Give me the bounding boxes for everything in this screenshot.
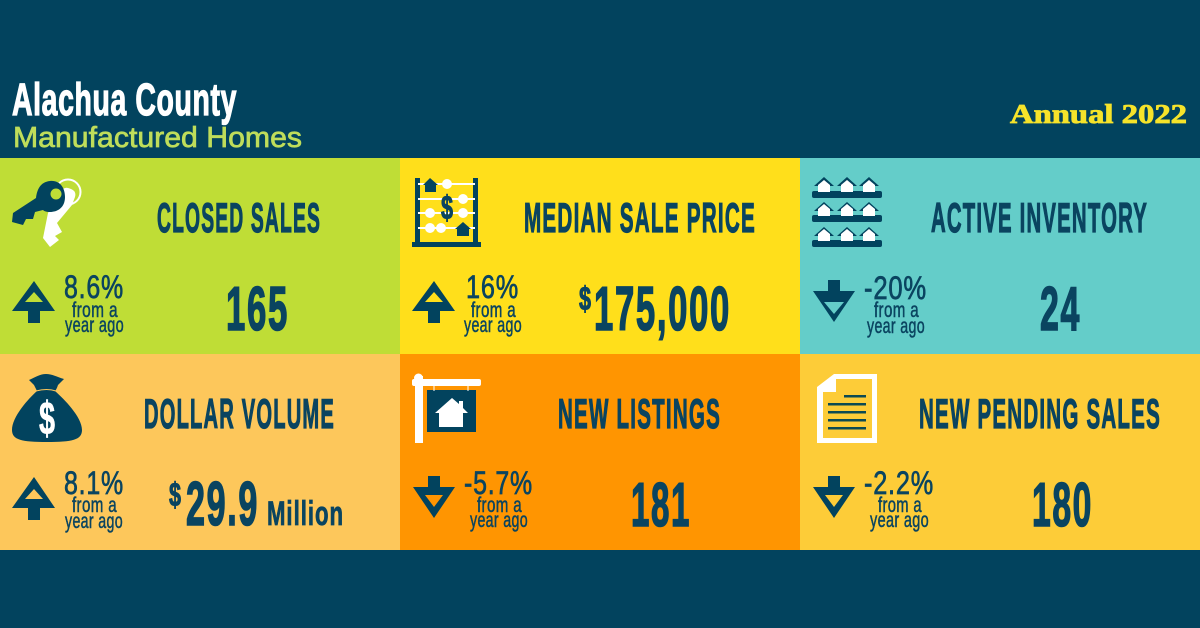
value: 165 [226, 275, 289, 344]
subtitle: Manufactured Homes [13, 122, 302, 154]
icon: down arrow [413, 476, 455, 518]
change text: from a [72, 494, 117, 517]
change text [64, 465, 124, 533]
change text: 16% [466, 269, 519, 305]
icon: document [817, 374, 877, 443]
change text: year ago [470, 509, 528, 532]
icon: abacus: $ [441, 189, 453, 226]
change text [864, 465, 934, 532]
panel: new listings: NEW LISTINGS [558, 390, 721, 437]
value: 24 [1040, 275, 1081, 344]
change text: year ago [867, 315, 925, 338]
change text: year ago [870, 509, 929, 532]
period label: Annual 2022 [1010, 99, 1187, 129]
change text: -5.7% [464, 465, 533, 501]
change text [464, 269, 522, 337]
icon: up arrow [12, 281, 55, 323]
panel: dollar volume [0, 354, 400, 550]
icon: money bag [12, 374, 82, 444]
icon: down arrow [813, 476, 855, 518]
change text: -2.2% [864, 465, 934, 501]
change text: from a [72, 299, 118, 322]
panel: new listings [400, 354, 800, 550]
panel: closed sales [0, 158, 400, 354]
change text [864, 270, 927, 338]
change text: year ago [65, 314, 124, 337]
change text: -20% [864, 270, 927, 306]
panel: dollar volume: DOLLAR VOLUME [144, 390, 335, 437]
change text: from a [874, 299, 919, 322]
change text [464, 465, 533, 532]
icon: up arrow [12, 477, 55, 520]
change text: year ago [65, 510, 123, 533]
icon: down arrow [813, 280, 855, 322]
change text [64, 269, 124, 337]
icon: up arrow [412, 281, 455, 323]
icon: money bag: $ [39, 392, 55, 444]
title: Alachua County [12, 74, 237, 125]
icon: keys [12, 180, 80, 247]
change text: from a [477, 494, 522, 517]
icon: houses on shelves [812, 177, 882, 247]
header [12, 74, 1187, 154]
panel: new pending sales [800, 354, 1200, 550]
value: 29.9 [186, 470, 259, 539]
icon: abacus [412, 178, 481, 247]
value: Million [267, 495, 344, 533]
value: 181 [631, 471, 691, 540]
value: $ [579, 280, 591, 317]
change text: from a [878, 494, 922, 517]
icon: house sign [412, 374, 481, 443]
panel: median sale price: MEDIAN SALE PRICE [524, 194, 756, 241]
value [579, 275, 731, 344]
panel: closed sales: CLOSED SALES [157, 194, 321, 241]
panel: active inventory [800, 158, 1200, 354]
change text: from a [471, 299, 516, 322]
value: 175,000 [594, 275, 731, 344]
value: 180 [1032, 471, 1093, 540]
change text: year ago [464, 314, 522, 337]
change text: 8.6% [64, 269, 124, 305]
panel: median sale price [400, 158, 800, 354]
change text: 8.1% [64, 465, 124, 501]
value: $ [169, 476, 181, 513]
